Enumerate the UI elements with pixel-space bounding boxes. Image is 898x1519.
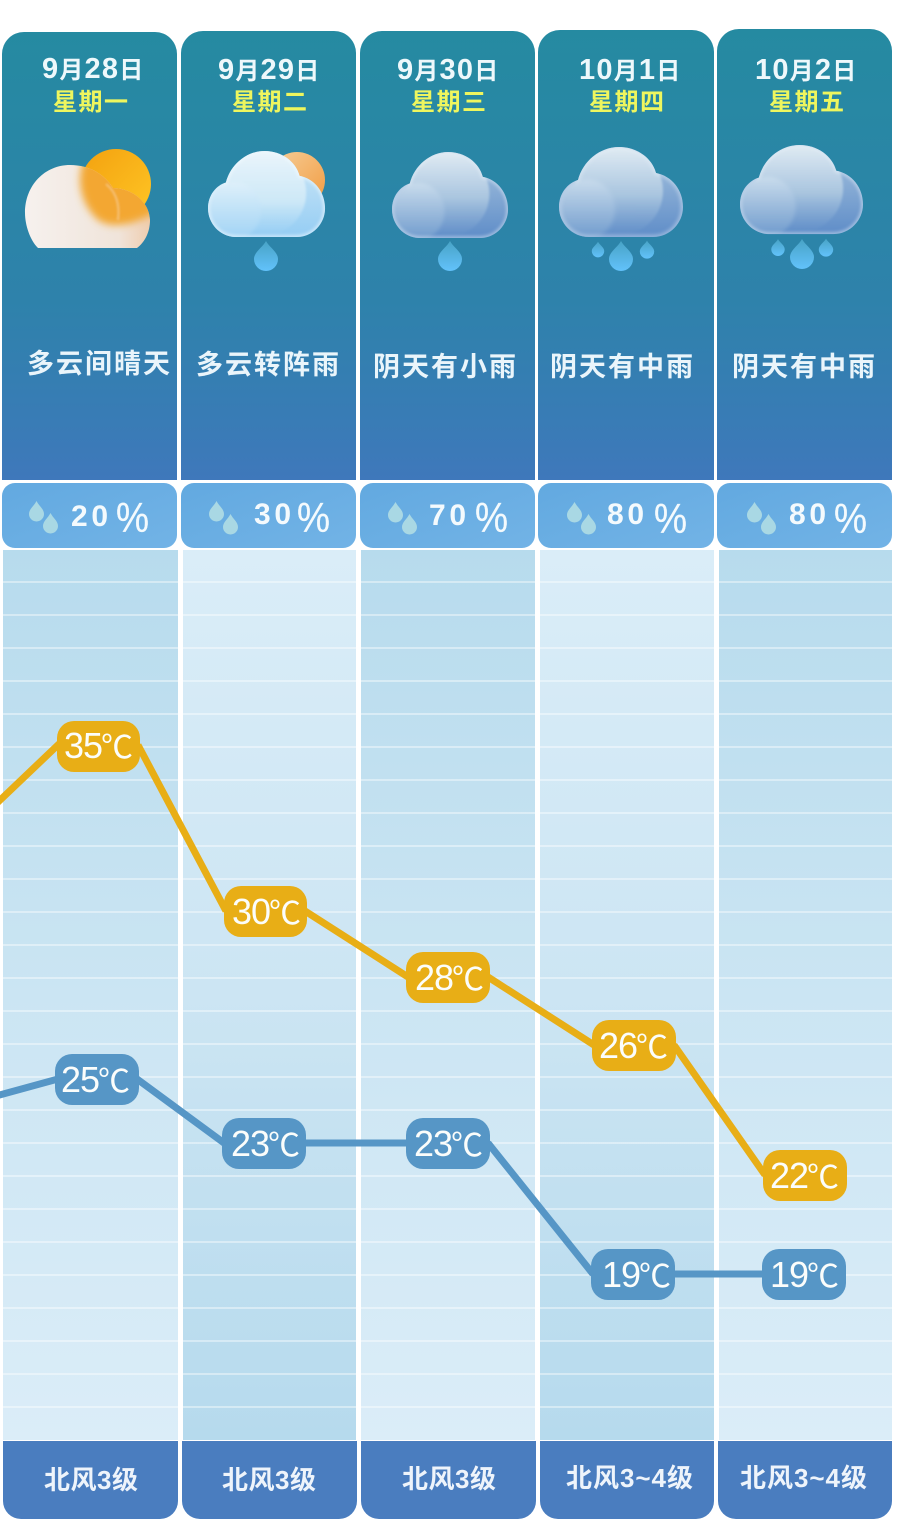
rain chance: 80%: 80 <box>607 498 644 531</box>
header panel: Sep 29 <box>181 31 356 480</box>
rain chance: 30% <box>181 483 356 548</box>
header panel: Oct 2 <box>717 29 892 480</box>
low temperature 23: 23℃ <box>414 1120 483 1166</box>
rain chance: 30%: % <box>297 494 330 541</box>
date: Sep 29: 9月29日 <box>218 54 320 86</box>
weather text: overcast moderate rain: 阴天有中雨 <box>550 352 693 382</box>
weather text: cloudy to showers: 多云转阵雨 <box>196 350 339 380</box>
low temperature 19: 19℃ <box>770 1251 839 1297</box>
rain chance: 20%: % <box>116 494 149 541</box>
rain chance: 80% <box>538 483 714 548</box>
weekday: Thursday: 星期四 <box>589 89 664 116</box>
date: Oct 1: 10月1日 <box>579 54 681 86</box>
icon: sun behind cloud <box>25 149 156 248</box>
high temperature 22: 22℃ <box>770 1152 839 1198</box>
chart column backgrounds <box>3 550 892 1440</box>
rain chance: 70% <box>360 483 535 548</box>
high temperature 26: 26℃ <box>599 1022 668 1068</box>
wind: north level 3 <box>3 1441 178 1519</box>
weekday: Friday: 星期五 <box>769 89 844 116</box>
weather text: cloudy with sun: 多云间晴天 <box>27 349 170 379</box>
date: Sep 28: 9月28日 <box>42 53 144 85</box>
low temperature 25: 25℃ <box>61 1056 130 1102</box>
weekday: Tuesday: 星期二 <box>232 89 307 116</box>
wind: north level 3 <box>361 1441 536 1519</box>
low temperature 19: 19℃ <box>602 1251 671 1297</box>
icon: cloud with three raindrops <box>740 145 863 269</box>
rain chance: 20% <box>2 483 177 548</box>
wind: north level 3: 北风3级 <box>402 1464 496 1494</box>
wind: north level 3 to 4 <box>540 1441 714 1519</box>
high temperature 30: 30℃ <box>232 888 301 934</box>
weekday: Monday: 星期一 <box>53 89 128 116</box>
rain chance: 20%: 20 <box>71 500 108 533</box>
weekday: Wednesday: 星期三 <box>411 89 486 116</box>
icon: cloud with one raindrop <box>392 152 508 271</box>
low temperature 23: 23℃ <box>231 1120 300 1166</box>
wind: north level 3 to 4: 北风3~4级 <box>566 1463 693 1493</box>
rain chance: 80%: % <box>834 495 867 542</box>
high temperature 35: 35℃ <box>64 722 133 768</box>
temperature chart panel <box>0 550 892 1440</box>
wind: north level 3: 北风3级 <box>222 1465 316 1495</box>
high temperature 28: 28℃ <box>415 954 484 1000</box>
date: Oct 2: 10月2日 <box>755 54 857 86</box>
rain chance: 70%: % <box>475 494 508 541</box>
icon: cloud with three raindrops <box>559 147 683 271</box>
header panel: Sep 28 <box>2 32 177 480</box>
line: daily low temperature <box>0 1079 764 1274</box>
icon: sun, cloud and raindrop <box>208 151 325 271</box>
wind: north level 3 to 4: 北风3~4级 <box>740 1463 867 1493</box>
rain chance: 80% <box>717 483 892 548</box>
header panel: Sep 30 <box>360 31 535 480</box>
wind: north level 3 <box>182 1441 357 1519</box>
date: Sep 30: 9月30日 <box>397 54 499 86</box>
weather text: overcast light rain: 阴天有小雨 <box>373 352 516 382</box>
line: daily high temperature <box>0 743 765 1175</box>
wind: north level 3 to 4 <box>718 1441 892 1519</box>
wind: north level 3: 北风3级 <box>44 1465 138 1495</box>
rain chance: 80%: 80 <box>789 498 826 531</box>
header panel: Oct 1 <box>538 30 714 480</box>
rain chance: 80%: % <box>654 495 687 542</box>
rain chance: 70%: 70 <box>429 499 466 532</box>
weather text: overcast moderate rain: 阴天有中雨 <box>732 352 875 382</box>
rain chance: 30%: 30 <box>254 498 291 531</box>
